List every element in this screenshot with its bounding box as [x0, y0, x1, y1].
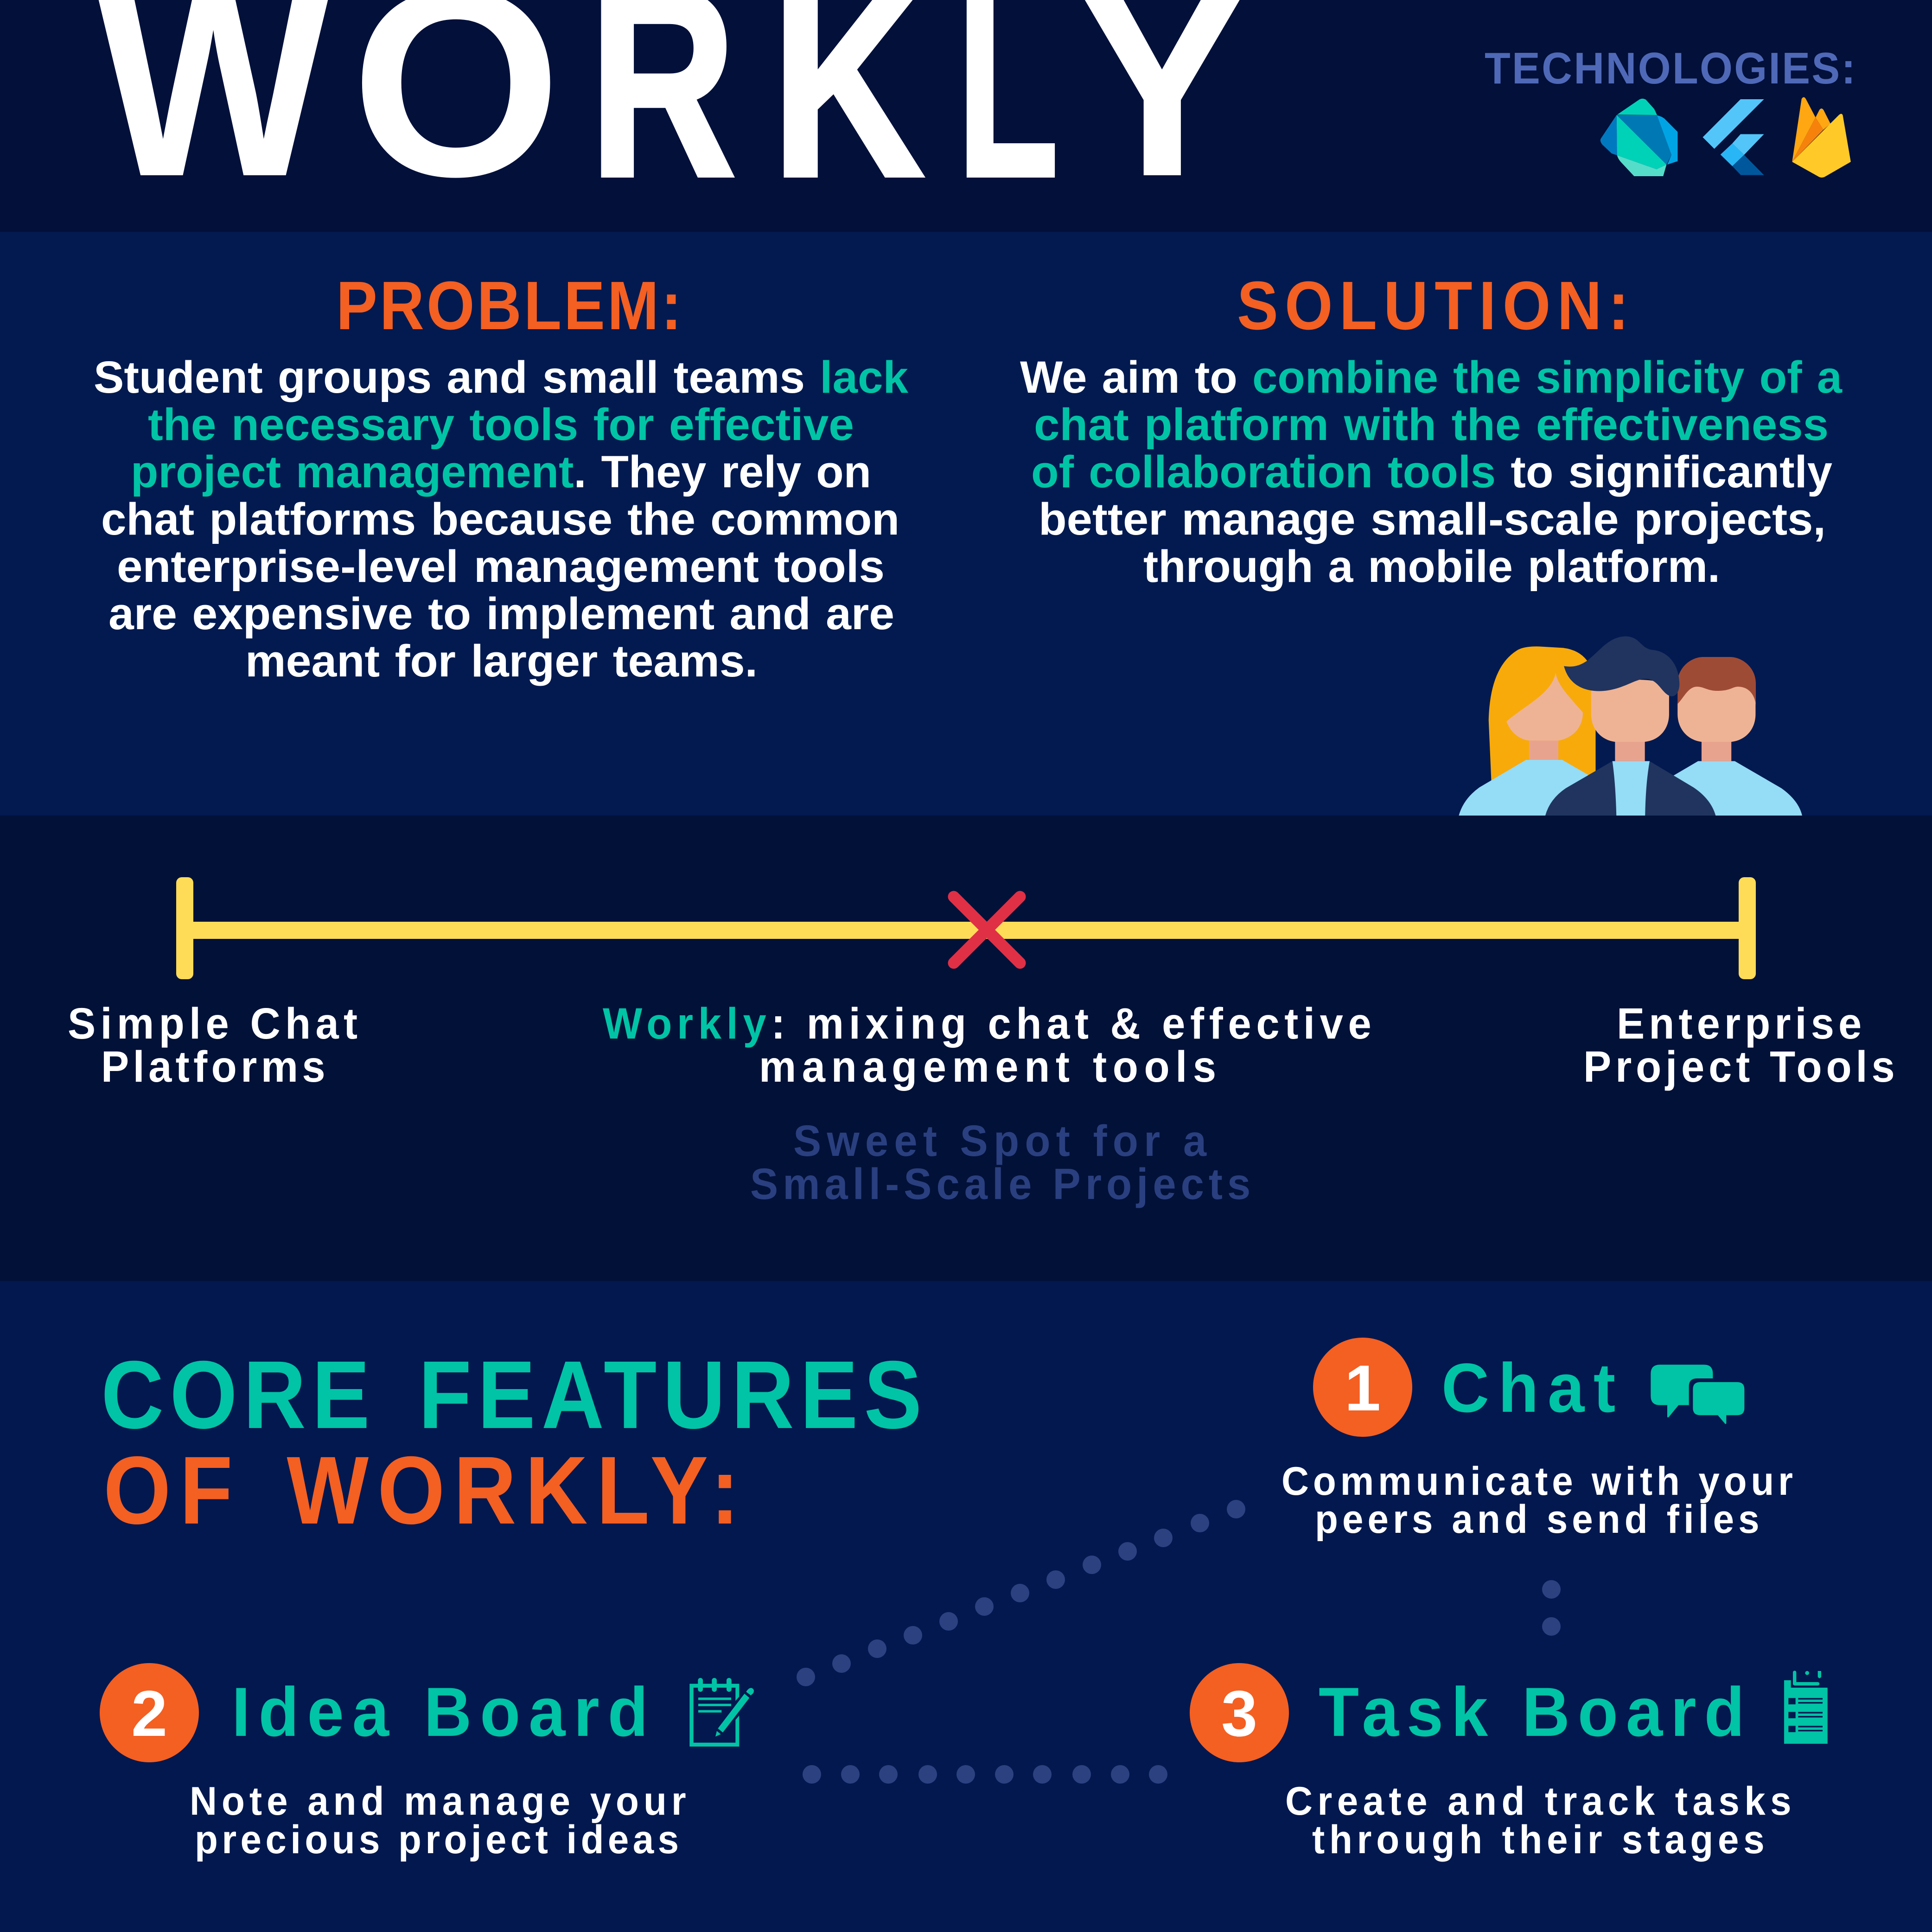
- background: core features panel: [0, 1281, 1932, 1932]
- solution text: of collaboration tools to significantly: [1031, 446, 1832, 497]
- label: workly position: management tools: [759, 1042, 1216, 1091]
- feature title: task board: Task Board: [1319, 1674, 1745, 1751]
- icon: task checklist: [1784, 1671, 1828, 1744]
- panel: solution: [1020, 268, 1843, 592]
- label: enterprise project tools: Project Tools: [1583, 1042, 1895, 1091]
- feature description: precious project ideas: [195, 1817, 679, 1862]
- number badge 2: 2: [131, 1677, 167, 1750]
- number badge 3: [1190, 1663, 1289, 1762]
- icon: dart logo: [1600, 99, 1677, 176]
- solution text: [1020, 352, 1843, 592]
- title: [96, 0, 1249, 232]
- feature description: through their stages: [1312, 1817, 1765, 1862]
- icon: chat bubbles: [1651, 1365, 1744, 1424]
- problem text: chat platforms because the common: [101, 494, 899, 544]
- label: simple chat platforms: [68, 999, 357, 1091]
- feature description: Note and manage your: [190, 1779, 686, 1823]
- label: simple chat platforms: Simple Chat: [68, 999, 357, 1048]
- spectrum line with end caps: [176, 877, 1756, 979]
- solution text: through a mobile platform.: [1143, 541, 1720, 592]
- label: sweet spot: Sweet Spot for a: [793, 1116, 1207, 1166]
- feature description: [190, 1779, 686, 1862]
- problem text: are expensive to implement and are: [108, 588, 894, 639]
- number badge 1: 1: [1345, 1352, 1381, 1424]
- panel: problem: [94, 268, 909, 686]
- feature 1: chat: [1282, 1338, 1793, 1541]
- feature description: Communicate with your: [1282, 1459, 1793, 1503]
- problem heading: PROBLEM:: [336, 268, 682, 344]
- label: enterprise project tools: [1583, 999, 1895, 1091]
- label: workly position: Workly: mixing chat & effective: [603, 999, 1371, 1048]
- solution heading: SOLUTION:: [1237, 268, 1629, 344]
- label: simple chat platforms: Platforms: [101, 1042, 325, 1091]
- background: spectrum band: [0, 816, 1932, 1281]
- label: workly position: [603, 999, 1371, 1091]
- technologies heading: TECHNOLOGIES:: [1485, 43, 1855, 93]
- icon: notepad and pencil: [689, 1678, 754, 1747]
- solution text: better manage small-scale projects,: [1039, 494, 1826, 544]
- icon: red cross marker: [954, 897, 1020, 963]
- label: enterprise project tools: Enterprise: [1617, 999, 1862, 1048]
- problem text: Student groups and small teams lack: [94, 352, 909, 402]
- label: sweet spot: [750, 1116, 1250, 1209]
- problem text: enterprise-level management tools: [117, 541, 885, 592]
- feature title: idea board: Idea Board: [232, 1674, 648, 1751]
- problem text: project management. They rely on: [131, 446, 871, 497]
- label: sweet spot: Small-Scale Projects: [750, 1159, 1250, 1209]
- background: header band: [0, 0, 1932, 232]
- solution text: We aim to combine the simplicity of a: [1020, 352, 1843, 402]
- heading: core features of workly: OF WORKLY:: [103, 1436, 740, 1544]
- illustration: three team members: [1459, 636, 1802, 816]
- icon: flutter logo: [1702, 99, 1764, 175]
- background: problem and solution panel: [0, 232, 1932, 816]
- problem text: the necessary tools for effective: [148, 399, 854, 450]
- feature 2: idea board: [100, 1663, 754, 1862]
- heading: core features of workly: CORE FEATURES: [101, 1341, 922, 1448]
- heading: core features of workly: [101, 1341, 922, 1544]
- feature title: chat: Chat: [1441, 1350, 1615, 1427]
- feature description: peers and send files: [1315, 1497, 1760, 1541]
- dotted connectors: [797, 1500, 1561, 1784]
- number badge 2: [100, 1663, 199, 1762]
- feature description: [1282, 1459, 1793, 1541]
- problem text: [94, 352, 909, 686]
- number badge 1: [1313, 1338, 1412, 1437]
- feature description: Create and track tasks: [1285, 1779, 1792, 1823]
- solution text: chat platform with the effectiveness: [1034, 399, 1829, 450]
- icon: firebase logo: [1792, 97, 1851, 178]
- feature description: [1285, 1779, 1792, 1862]
- feature 3: task board: [1190, 1663, 1828, 1862]
- number badge 3: 3: [1221, 1677, 1257, 1750]
- problem text: meant for larger teams.: [245, 636, 758, 686]
